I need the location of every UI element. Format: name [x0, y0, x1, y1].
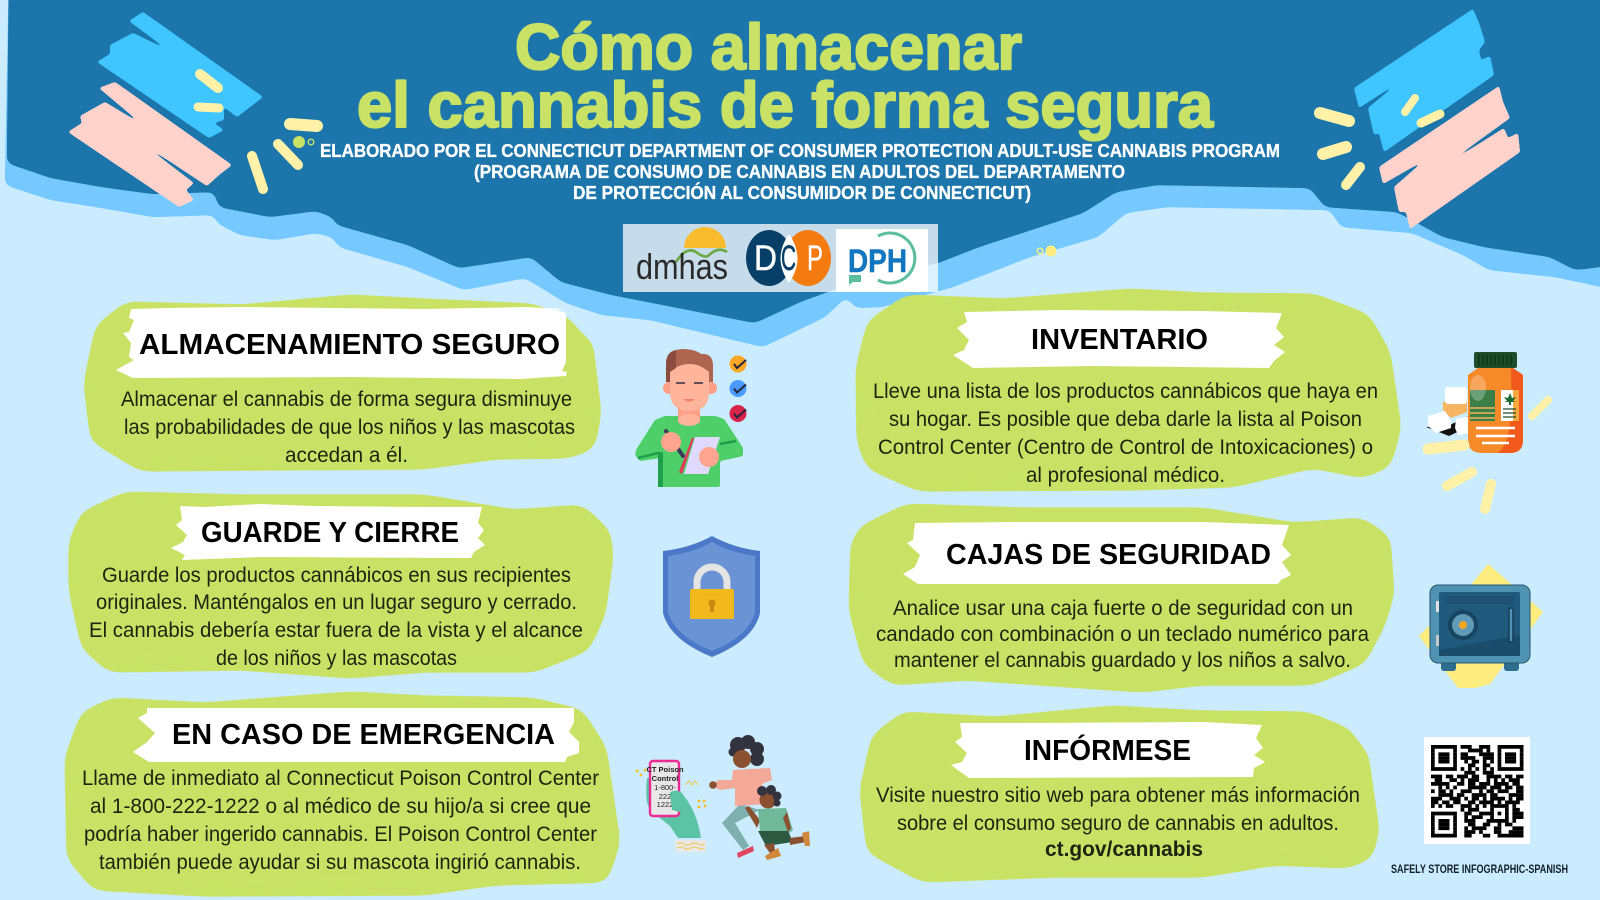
icon: phone with poison control number: 1222	[657, 800, 673, 809]
logo: DCP: D	[754, 239, 777, 278]
icon: phone with poison control number: Control	[652, 774, 678, 783]
subtitle: DE PROTECCIÓN AL CONSUMIDOR DE CONNECTICUT)	[573, 182, 1031, 203]
panel: cajas de seguridad	[847, 502, 1396, 694]
body text: Analice usar una caja fuerte o de seguridad con un	[893, 597, 1353, 620]
decoration: left brush strokes	[68, 12, 317, 207]
body text: sobre el consumo seguro de cannabis en adultos.	[897, 812, 1339, 835]
body text: El cannabis debería estar fuera de la vista y el alcance	[89, 619, 583, 642]
subtitle	[320, 140, 1280, 203]
logo: dmhas	[636, 227, 728, 287]
heading: CAJAS DE SEGURIDAD	[946, 539, 1271, 571]
body text: ct.gov/cannabis	[1045, 838, 1203, 861]
subtitle: (PROGRAMA DE CONSUMO DE CANNABIS EN ADULTOS DEL DEPARTAMENTO	[474, 161, 1125, 182]
icon: cannabis jar and edibles	[1426, 352, 1548, 509]
body text	[89, 564, 583, 670]
icon: checklist marks	[730, 356, 746, 422]
body text: Llame de inmediato al Connecticut Poison Control Center	[82, 767, 599, 790]
logo: DPH: DPH	[848, 243, 907, 279]
body text: Almacenar el cannabis de forma segura disminuye	[121, 388, 572, 411]
icon: shield with padlock	[663, 536, 760, 657]
subtitle: ELABORADO POR EL CONNECTICUT DEPARTMENT OF CONSUMER PROTECTION ADULT-USE CANNABIS PROGRAM	[320, 140, 1280, 161]
icon: safe	[1419, 564, 1543, 688]
icon: phone with poison control number	[636, 761, 706, 852]
heading: GUARDE Y CIERRE	[201, 517, 459, 549]
decoration: right brush strokes	[1037, 9, 1520, 256]
body text	[873, 380, 1378, 487]
logo: DCP: P	[807, 239, 823, 278]
icon: phone with poison control number: 1-800-	[654, 783, 676, 792]
body text: Lleve una lista de los productos cannábicos que haya en	[873, 380, 1378, 403]
heading: INFÓRMESE	[1024, 733, 1191, 767]
panel: inventario	[854, 287, 1403, 493]
title: Cómo almacenar	[515, 11, 1022, 83]
body text: podría haber ingerido cannabis. El Poison Control Center	[84, 823, 597, 846]
heading: INVENTARIO	[1031, 324, 1208, 356]
title: el cannabis de forma segura	[357, 69, 1213, 141]
body text: Guarde los productos cannábicos en sus recipientes	[102, 564, 571, 587]
body text: también puede ayudar si su mascota ingirió cannabis.	[99, 851, 581, 874]
body text: las probabilidades de que los niños y las mascotas	[124, 416, 575, 439]
body text: Control Center (Centro de Control de Intoxicaciones) o	[878, 436, 1373, 459]
body text: candado con combinación o un teclado numérico para	[876, 623, 1369, 646]
body text: su hogar. Es posible que deba darle la lista al Poison	[889, 408, 1362, 431]
body text	[121, 388, 575, 467]
logo: DCP: C	[781, 239, 796, 278]
panel: infórmese	[858, 704, 1381, 884]
body text: Visite nuestro sitio web para obtener más información	[876, 784, 1360, 807]
body text	[876, 784, 1360, 861]
heading: ALMACENAMIENTO SEGURO	[139, 329, 560, 361]
logo: DPH	[848, 233, 915, 285]
logo: DCP	[746, 230, 831, 286]
panel: guarde y cierre	[67, 490, 615, 680]
icon: phone with poison control number: CT Poison	[646, 765, 684, 774]
body text	[82, 767, 599, 874]
header wave: mid blue band	[5, 0, 1600, 347]
panel: almacenamiento seguro	[82, 293, 603, 473]
title	[357, 11, 1213, 141]
logos strip	[623, 224, 938, 292]
header wave: dark blue	[7, 0, 1600, 323]
body text: mantener el cannabis guardado y los niños a salvo.	[894, 649, 1351, 672]
body text	[876, 597, 1369, 672]
logo: dmhas: dmhas	[636, 246, 728, 287]
edibles cubes	[1426, 387, 1470, 436]
body text: accedan a él.	[285, 444, 408, 467]
QR code	[1424, 737, 1530, 844]
body text: al 1-800-222-1222 o al médico de su hijo/a si cree que	[90, 795, 591, 818]
body text: originales. Manténgalos en un lugar seguro y cerrado.	[96, 591, 577, 614]
icon: phone with poison control number: 222	[659, 792, 671, 801]
panel: en caso de emergencia	[63, 690, 622, 898]
decoration: jar sparks	[1428, 400, 1548, 509]
icon: person with checklist	[635, 349, 746, 487]
heading: EN CASO DE EMERGENCIA	[172, 719, 555, 751]
body text: al profesional médico.	[1026, 464, 1225, 487]
body text: de los niños y las mascotas	[216, 647, 457, 670]
icon: running adult and child	[709, 735, 810, 860]
